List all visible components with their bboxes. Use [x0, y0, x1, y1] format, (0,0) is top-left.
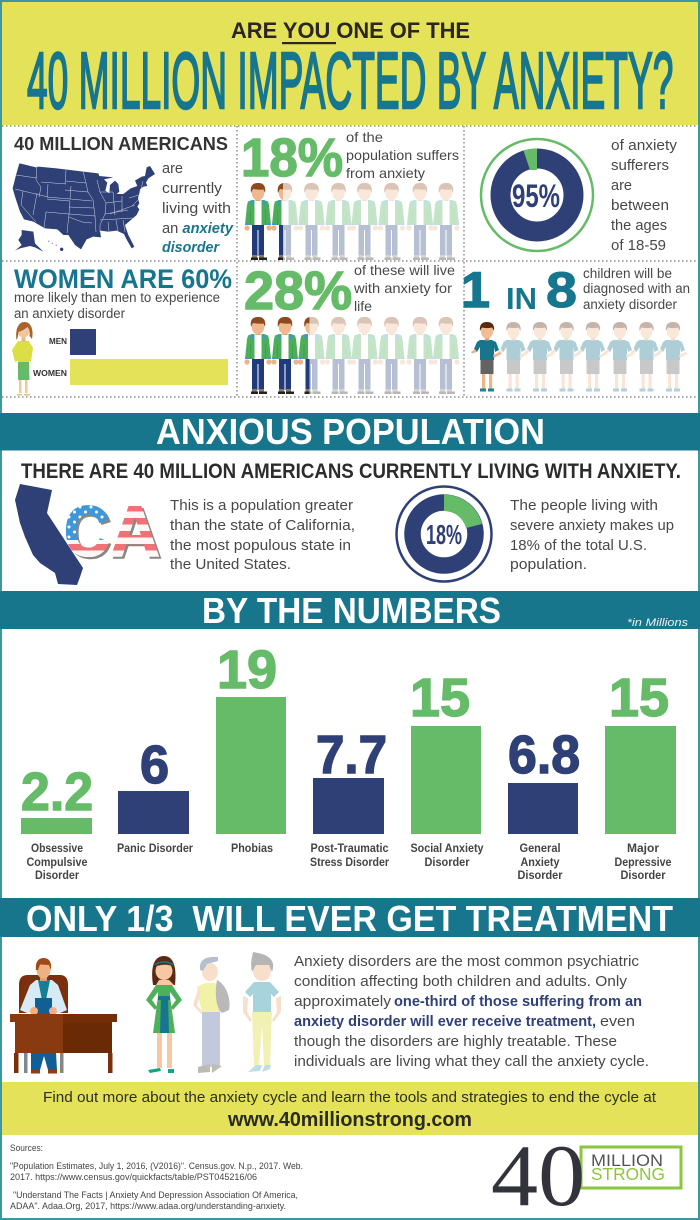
- sources: ADAA". Adaa.Org, 2017, https://www.adaa.org/understanding-anxiety.: [10, 1201, 286, 1212]
- donut chart 95%: [481, 139, 593, 251]
- icon: woman in green dress: [146, 956, 182, 1073]
- section band: anxious population: [0, 411, 700, 452]
- donut chart 18%: 18%: [426, 519, 462, 550]
- text: severe anxiety: severe anxiety makes up: [510, 517, 674, 534]
- call to action band: [2, 1082, 698, 1135]
- row of eight men, 28 percent highlighted: [244, 317, 460, 394]
- stat text: [353, 262, 455, 314]
- bar: social anxiety disorder: Disorder: [424, 857, 470, 869]
- bar: obsessive compulsive disorder: [21, 762, 93, 882]
- bar chart: men vs women: MEN: [49, 336, 67, 346]
- panel: 40 million americans: [13, 133, 234, 256]
- text: California comparison: the United States.: [170, 556, 291, 573]
- text: treatment paragraph: approximately: [294, 994, 392, 1010]
- stat text: [346, 129, 459, 181]
- text: treatment paragraph: though the disorders are highly treatable. These: [294, 1034, 617, 1050]
- text: treatment paragraph: [294, 954, 649, 1070]
- icon: faded man in blue shirt: [243, 952, 281, 1072]
- description: an anxiety disorder: [14, 306, 125, 321]
- bar chart: men vs women: [33, 329, 228, 385]
- icon: doctor at desk: [10, 958, 117, 1074]
- logo: 40 million strong: STRONG: [591, 1164, 665, 1184]
- bar: major depressive disorder: Depressive: [614, 857, 672, 869]
- panel: 95 percent: [481, 137, 677, 254]
- panel: women are 60 percent: [12, 264, 232, 396]
- bar: social anxiety disorder: [410, 668, 484, 869]
- section band: by the numbers: BY THE NUMBERS: [202, 590, 501, 631]
- description: more likely than men to experience: [14, 290, 220, 305]
- bar: panic disorder: 6: [140, 735, 169, 795]
- bar: post-traumatic stress disorder: Stress Disorder: [310, 857, 389, 869]
- stat text: the ages: [611, 217, 667, 234]
- bar: social anxiety disorder: 15: [410, 668, 470, 728]
- icon: CA flag letters: A: [112, 493, 162, 573]
- side text: are: [162, 160, 183, 177]
- title line 1: ARE YOU ONE OF THE: [231, 18, 470, 43]
- text: treatment paragraph: condition affecting both children and adults. Only: [294, 974, 628, 990]
- icon: CA flag letters: C: [64, 493, 110, 572]
- bar: post-traumatic stress disorder: 7.7: [316, 725, 387, 785]
- bar chart: men vs women: WOMEN: [33, 368, 67, 378]
- bar: general anxiety disorder: Disorder: [518, 870, 563, 882]
- sources: [10, 1143, 303, 1212]
- text: severe anxiety: population.: [510, 556, 587, 573]
- stat text: from anxiety: [346, 165, 425, 181]
- stat: 28%: [244, 261, 352, 321]
- bar: obsessive compulsive disorder: 2.2: [21, 762, 93, 822]
- stat: 1: [461, 262, 490, 318]
- stat: IN: [506, 281, 537, 316]
- text: California comparison: [170, 497, 355, 573]
- stat text: [583, 266, 690, 312]
- side text: living with: [162, 200, 231, 217]
- bar: major depressive disorder: 15: [609, 668, 669, 728]
- logo: 40 million strong: MILLION: [591, 1151, 663, 1170]
- stat text: sufferers: [611, 157, 669, 174]
- bar: panic disorder: Panic Disorder: [117, 843, 193, 855]
- bar: general anxiety disorder: 6.8: [508, 725, 580, 785]
- bar: general anxiety disorder: General: [520, 843, 560, 855]
- bar: major depressive disorder: [605, 668, 676, 882]
- bar: obsessive compulsive disorder: Obsessive: [31, 843, 83, 855]
- bar chart: by the numbers: [21, 640, 676, 882]
- stat text: [611, 137, 677, 254]
- title line 2: 40 MILLION IMPACTED BY ANXIETY?: [27, 37, 673, 126]
- icon: woman: [12, 322, 33, 396]
- icon: CA flag letters: [66, 505, 162, 560]
- heading: WOMEN ARE 60%: [14, 264, 232, 294]
- stat: 18%: [241, 128, 343, 188]
- call to action band: www.40millionstrong.com: [227, 1109, 472, 1131]
- bar: obsessive compulsive disorder: Compulsive: [26, 857, 88, 869]
- bar: post-traumatic stress disorder: Post-Traumatic: [310, 843, 389, 855]
- text: severe anxiety: The people living with: [510, 497, 658, 514]
- sources: Sources:: [10, 1143, 43, 1154]
- side text: currently: [162, 180, 223, 197]
- side text: disorder: [162, 239, 220, 256]
- stat text: life: [354, 298, 372, 314]
- panel: 18 percent: [241, 128, 460, 260]
- text: treatment paragraph: even: [600, 1014, 635, 1030]
- sources: "Understand The Facts | Anxiety And Depression Association Of America,: [13, 1190, 298, 1201]
- section band: anxious population: ANXIOUS POPULATION: [156, 411, 545, 452]
- text: severe anxiety: [510, 497, 674, 573]
- bar: panic disorder: [117, 735, 193, 855]
- stat text: of 18-59: [611, 237, 666, 254]
- panel: 28 percent: [244, 261, 460, 394]
- donut chart 18%: [396, 486, 492, 582]
- text: treatment paragraph: one-third of those suffering from an: [394, 994, 642, 1010]
- description: [14, 290, 220, 321]
- stat text: of these will live: [354, 262, 455, 278]
- icon: map of California: [15, 484, 83, 585]
- section band: by the numbers: [0, 590, 700, 631]
- bar: social anxiety disorder: Social Anxiety: [410, 843, 484, 855]
- stat text: diagnosed with an: [583, 281, 690, 296]
- stat text: of anxiety: [611, 137, 677, 154]
- row of eight children, one highlighted: [471, 322, 688, 392]
- stat: [461, 262, 577, 318]
- bar: general anxiety disorder: [508, 725, 580, 882]
- stat text: population suffers: [346, 147, 459, 163]
- stat text: anxiety disorder: [583, 297, 677, 312]
- text: treatment paragraph: individuals are living what they call the anxiety cycle.: [294, 1054, 649, 1070]
- note: in millions: *in Millions: [627, 617, 689, 629]
- bar: phobias: Phobias: [231, 843, 273, 855]
- stat text: between: [611, 197, 669, 214]
- bar: phobias: 19: [217, 640, 277, 700]
- icon: CA flag letters: C: [64, 493, 110, 572]
- bar: post-traumatic stress disorder: [310, 725, 389, 869]
- text: severe anxiety: 18% of the total U.S.: [510, 537, 647, 554]
- bar: general anxiety disorder: Anxiety: [520, 857, 560, 869]
- stat text: are: [611, 177, 632, 194]
- icon: faded man with backpack: [193, 957, 230, 1073]
- call to action band: Find out more about the anxiety cycle and learn the tools and strategies to end the cycle at: [43, 1089, 657, 1106]
- sources: 2017. https://www.census.gov/quickfacts/table/PST045216/06: [10, 1172, 257, 1183]
- text: treatment paragraph: anxiety disorder will ever receive treatment,: [294, 1014, 596, 1030]
- header banner: [2, 2, 698, 126]
- stat: 8: [546, 263, 577, 318]
- text: California comparison: This is a population greater: [170, 497, 353, 514]
- side text: an anxiety: [162, 220, 234, 237]
- heading: 40 MILLION AMERICANS: [14, 133, 228, 154]
- icon: CA flag letters: A: [110, 493, 160, 572]
- bar: phobias: [216, 640, 286, 855]
- text: California comparison: than the state of California,: [170, 517, 355, 534]
- text: California comparison: the most populous state in: [170, 537, 351, 554]
- icon: CA flag letters: C: [66, 495, 112, 574]
- side text: [162, 160, 234, 256]
- bar: major depressive disorder: Major: [627, 843, 660, 855]
- bar: major depressive disorder: Disorder: [620, 870, 666, 882]
- stat text: children will be: [583, 266, 672, 281]
- panel: 1 in 8 children: [461, 262, 690, 392]
- bar: obsessive compulsive disorder: Disorder: [35, 870, 79, 882]
- map of the United States: [13, 163, 155, 252]
- text: treatment paragraph: Anxiety disorders are the most common psychiatric: [294, 954, 639, 970]
- sources: "Population Estimates, July 1, 2016, (V2016)". Census.gov. N.p., 2017. Web.: [10, 1161, 303, 1172]
- stat text: with anxiety for: [353, 280, 452, 296]
- row of eight men, 18 percent highlighted: [244, 183, 460, 260]
- stat text: of the: [346, 129, 383, 145]
- section band: only 1/3 will ever get treatment: ONLY 1/3 WILL EVER GET TREATMENT: [26, 898, 673, 939]
- logo: 40 million strong: [491, 1127, 681, 1220]
- donut chart 95%: 95%: [512, 178, 560, 214]
